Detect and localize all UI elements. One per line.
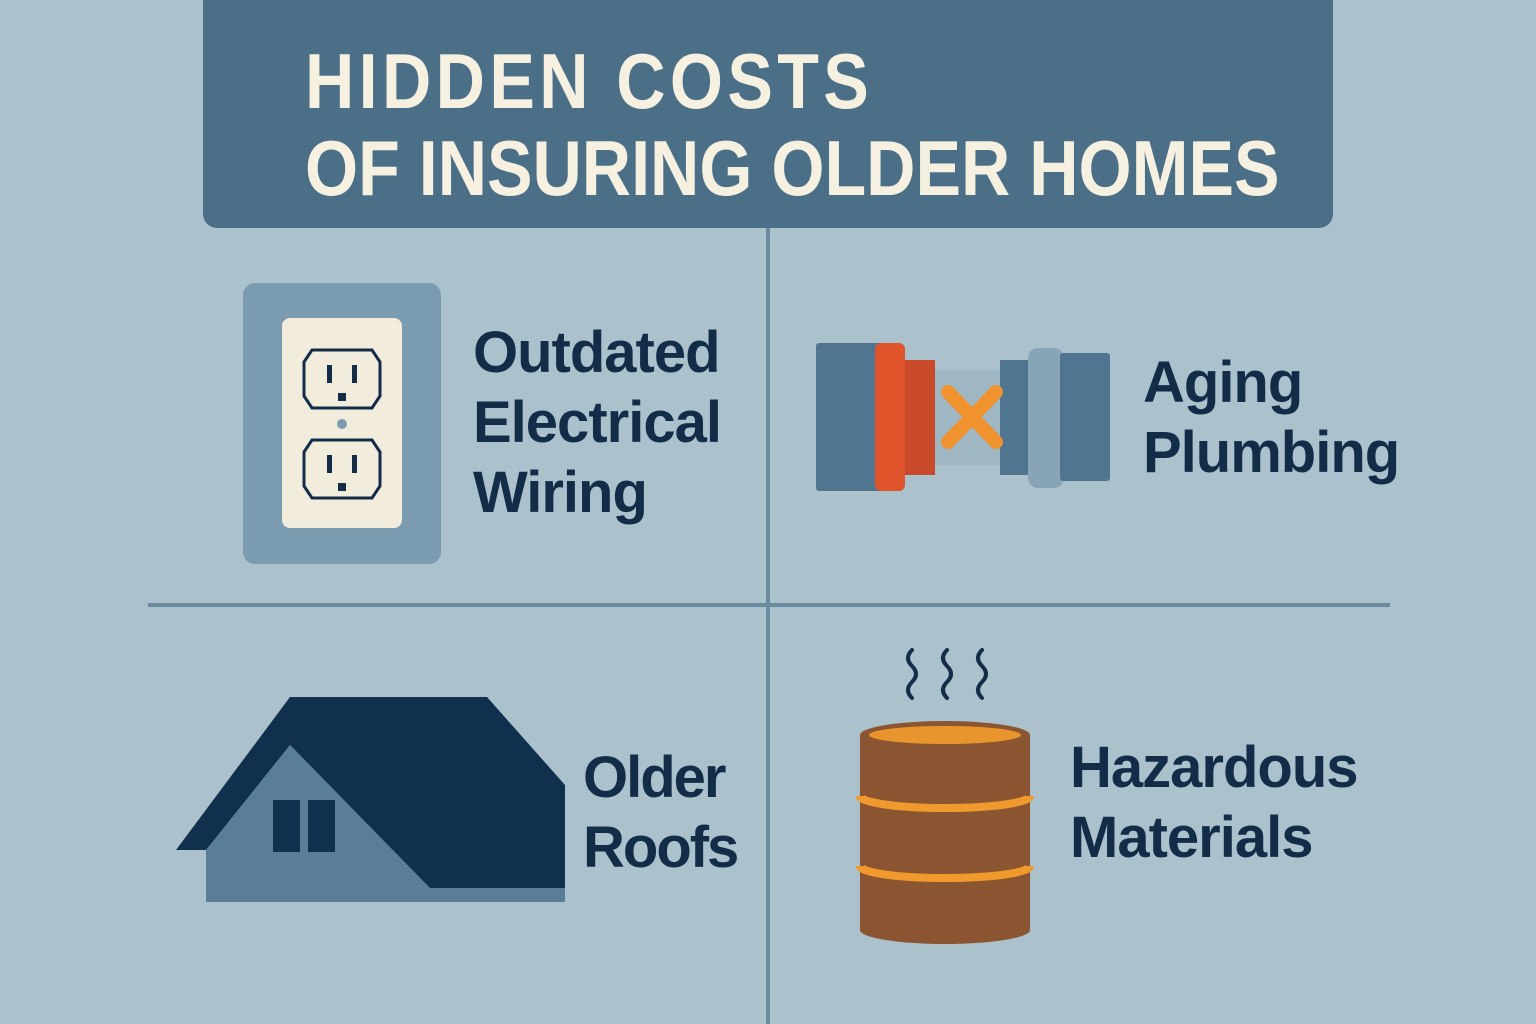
text: aging plumbing: Aging bbox=[1143, 350, 1302, 415]
text: hazardous materials: Hazardous bbox=[1070, 735, 1358, 800]
text: older roofs: Older bbox=[583, 745, 724, 810]
title text: OF INSURING OLDER HOMES bbox=[305, 124, 1280, 212]
text: older roofs: Roofs bbox=[583, 815, 737, 880]
text: outdated electrical wiring bbox=[473, 320, 721, 525]
text: outdated electrical wiring: Electrical bbox=[473, 390, 721, 455]
icon: hazardous barrel bbox=[856, 648, 1034, 944]
text: aging plumbing bbox=[1143, 350, 1399, 485]
text: outdated electrical wiring: Wiring bbox=[473, 460, 647, 525]
text: aging plumbing: Plumbing bbox=[1143, 420, 1399, 485]
title text: HIDDEN COSTS bbox=[305, 37, 873, 125]
title banner bbox=[203, 0, 1333, 228]
icon: pipe bbox=[816, 343, 1110, 491]
text: older roofs bbox=[583, 745, 737, 880]
text: hazardous materials: Materials bbox=[1070, 805, 1312, 870]
title text bbox=[305, 37, 1280, 212]
icon: house roof bbox=[176, 697, 565, 902]
text: outdated electrical wiring: Outdated bbox=[473, 320, 720, 385]
text: hazardous materials bbox=[1070, 735, 1358, 870]
